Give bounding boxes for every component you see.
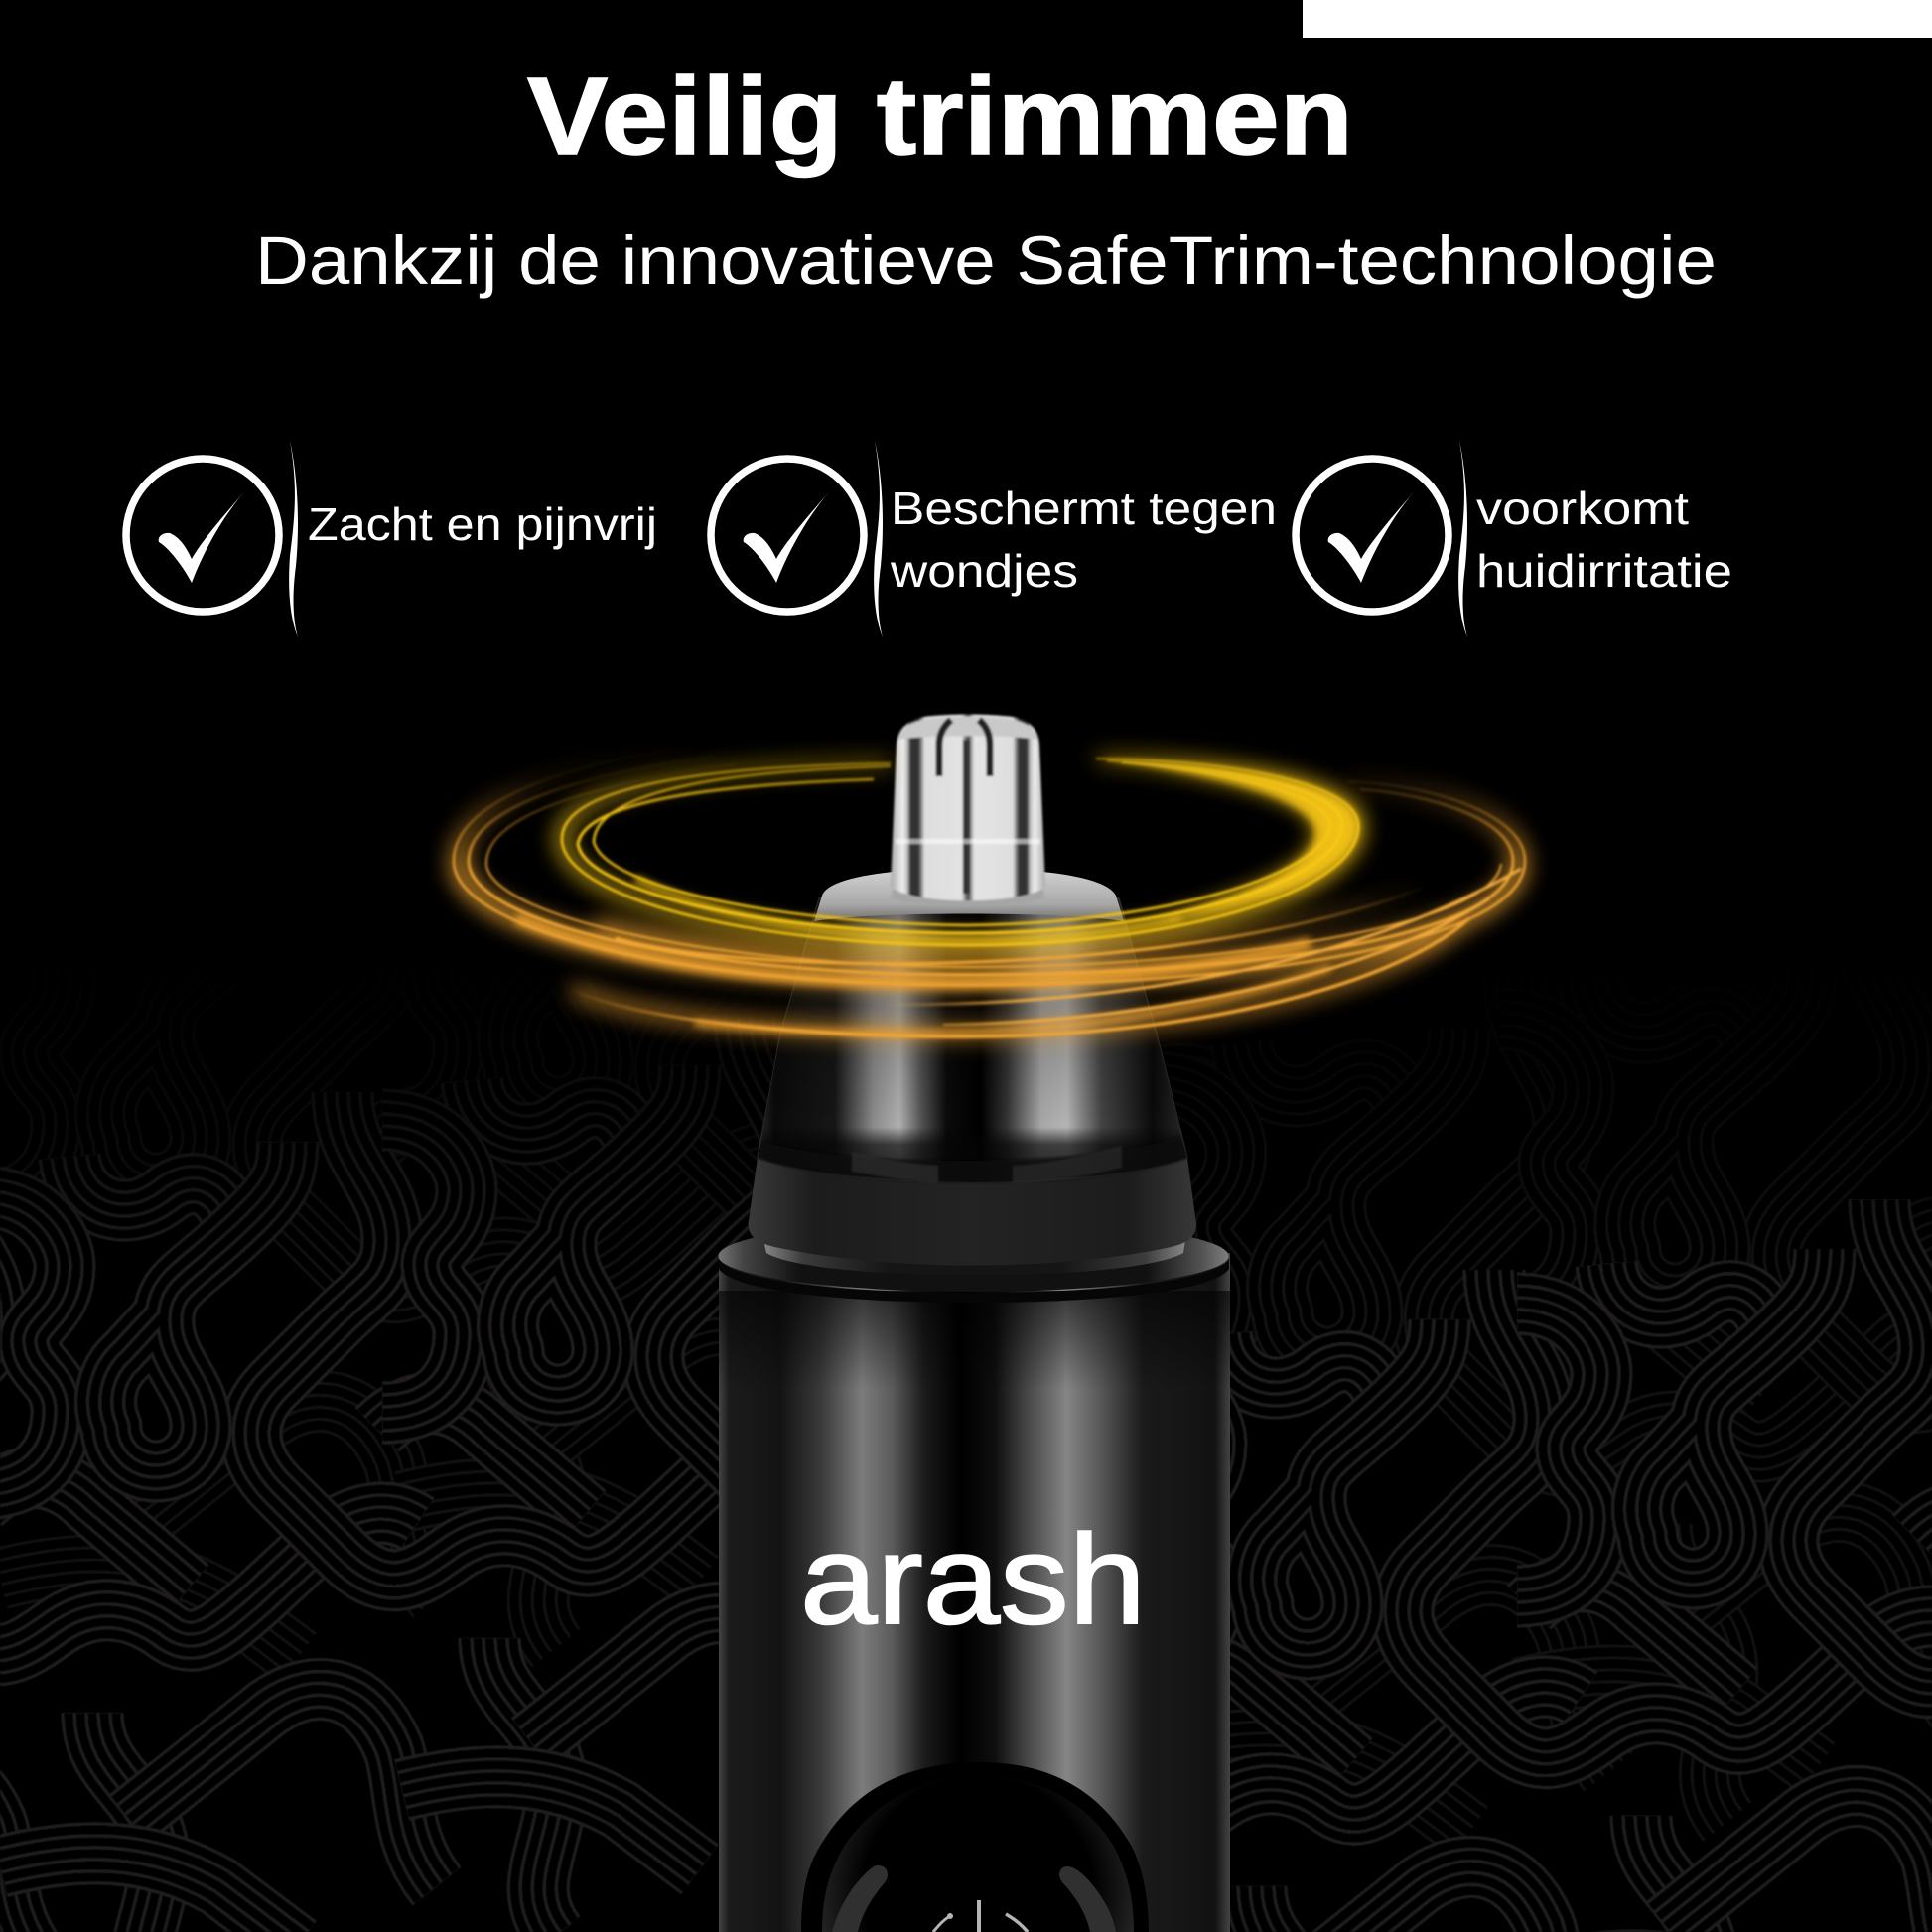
icon: right button arc	[1059, 1866, 1116, 1932]
label 3: voorkomt	[1476, 483, 1689, 534]
subtitle: Dankzij de innovatieve SafeTrim-technologie	[255, 222, 1717, 299]
icon: left button arc	[832, 1865, 888, 1932]
yellow front band	[635, 879, 1181, 941]
orange ring glow	[459, 747, 1519, 1033]
label 3	[1476, 483, 1732, 597]
title: Veilig trimmen	[527, 56, 1353, 178]
cutting tip	[891, 715, 1045, 906]
label 2	[890, 483, 1277, 597]
label 3: huidirritatie	[1476, 545, 1732, 597]
neck ring	[761, 1227, 1187, 1275]
orange ring strands	[454, 747, 1525, 1036]
silver collar	[814, 872, 1124, 921]
feature 2: Beschermt tegen wondjes	[711, 441, 1277, 637]
yellow broad crescent	[1096, 759, 1358, 923]
feature 1: Zacht en pijnvrij	[126, 441, 657, 637]
product: nose trimmer	[719, 715, 1230, 1932]
trimmer body	[719, 1220, 1230, 1932]
label 1: Zacht en pijnvrij	[308, 498, 657, 550]
label 2: Beschermt tegen	[891, 483, 1277, 534]
label 2: wondjes	[890, 545, 1078, 597]
cone	[758, 898, 1187, 1183]
power button panel	[801, 1762, 1149, 1932]
icon: power symbol	[933, 1900, 1028, 1932]
dark band	[749, 1158, 1196, 1265]
yellow ring glow	[562, 759, 1358, 943]
yellow ring strands	[562, 759, 1358, 945]
icon: check circle 3	[1296, 459, 1449, 612]
background wave line pattern	[0, 1042, 1932, 1932]
icon: check circle 1	[126, 459, 279, 612]
golden spinning rings	[454, 747, 1525, 1036]
white bar top right	[1303, 0, 1932, 38]
orange broad front band	[516, 918, 1330, 1034]
feature 3: voorkomt huidirritatie	[1296, 441, 1732, 637]
brand name on body: arash	[800, 1509, 1146, 1651]
icon: check circle 2	[711, 459, 864, 612]
